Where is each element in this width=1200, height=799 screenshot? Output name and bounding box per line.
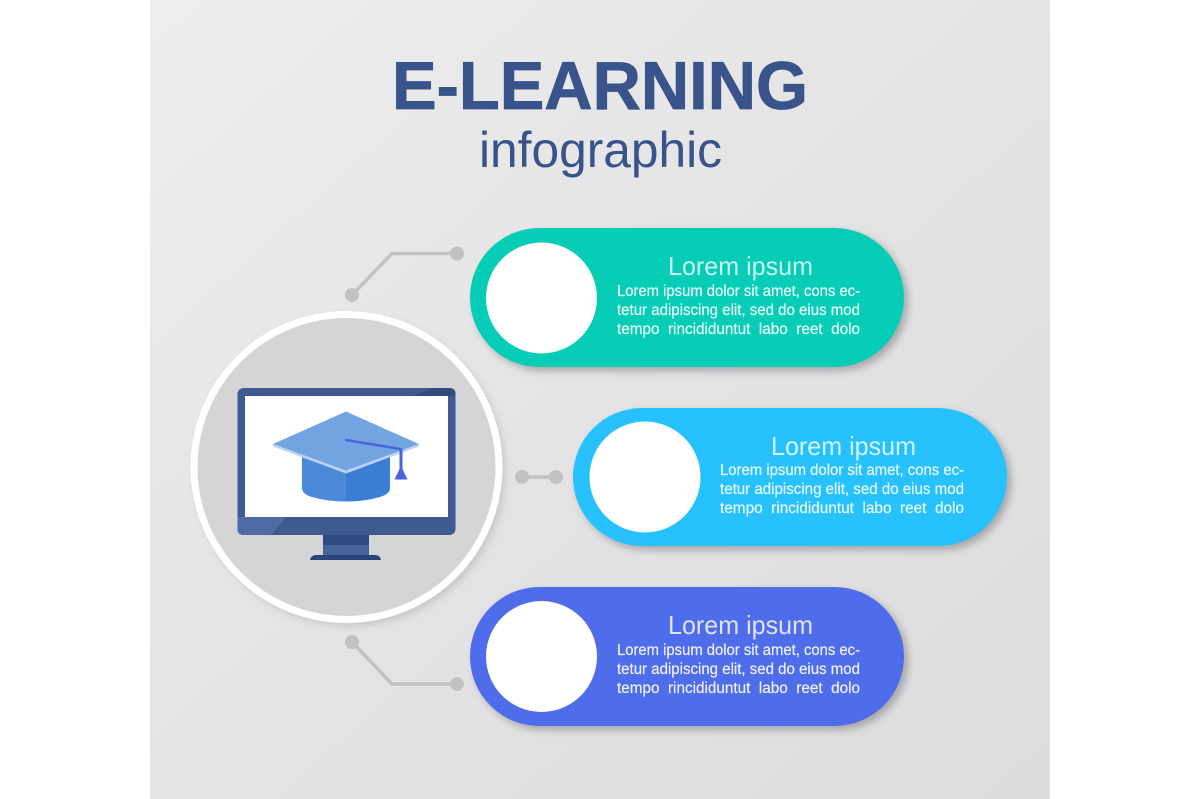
body text: Lorem ipsum dolor sit amet, cons ec- [617,642,860,659]
body text: tempo rincididuntut labo reet dolo [720,500,964,517]
panel: teal [470,228,908,371]
body text [617,283,860,338]
body text [617,642,860,697]
icon placeholder [486,242,597,354]
body text: tetur adipiscing elit, sed do eius mod [617,661,860,678]
body text: tempo rincididuntut labo reet dolo [617,321,860,338]
connector: bottom [345,635,464,691]
body text: Lorem ipsum dolor sit amet, cons ec- [720,462,964,479]
body text: tetur adipiscing elit, sed do eius mod [617,302,860,319]
icon placeholder [486,601,597,712]
connector: top [345,246,464,302]
icon placeholder [590,422,700,532]
heading: Lorem ipsum [668,251,813,281]
title: E-LEARNING [392,48,808,124]
central circle with monitor [190,311,505,626]
icon: monitor [238,388,456,560]
body text: tetur adipiscing elit, sed do eius mod [720,481,964,498]
body text [720,462,964,517]
body text: tempo rincididuntut labo reet dolo [617,680,860,697]
connector: middle [515,470,563,484]
heading: Lorem ipsum [668,610,813,640]
subtitle: infographic [479,122,722,178]
body text: Lorem ipsum dolor sit amet, cons ec- [617,283,860,300]
heading: Lorem ipsum [771,431,916,461]
panel: indigo [470,587,908,730]
panel: sky blue [573,408,1011,550]
icon: graduation cap [273,412,419,502]
